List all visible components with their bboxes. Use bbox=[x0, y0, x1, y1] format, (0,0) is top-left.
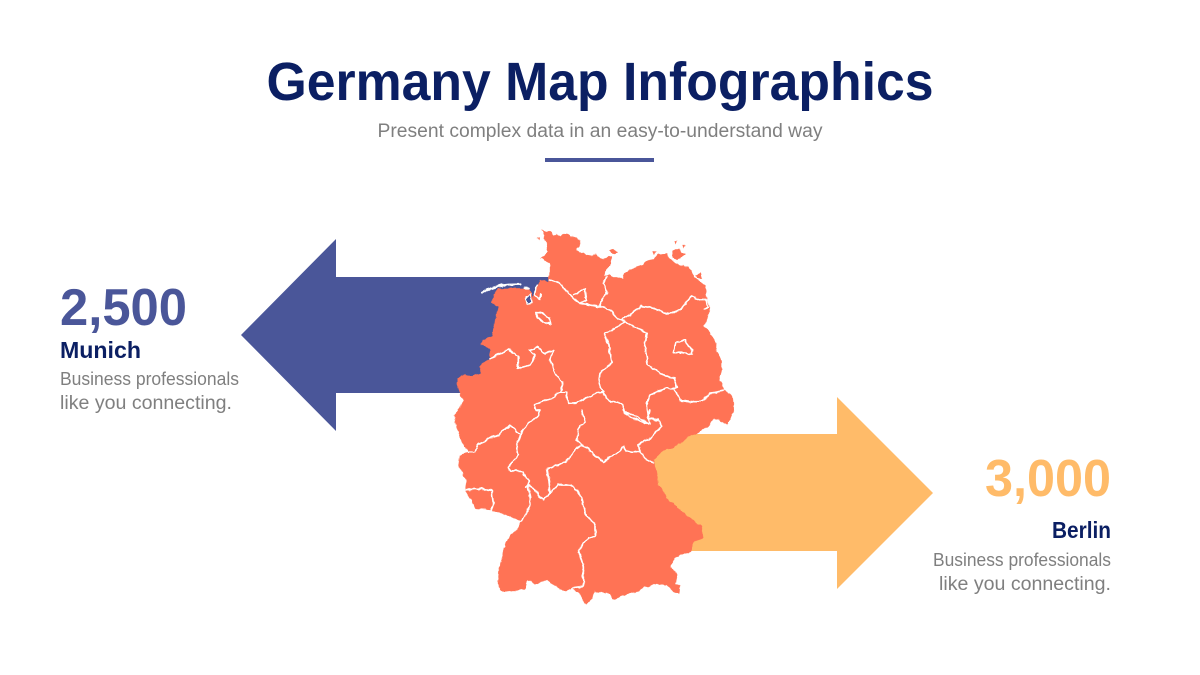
value 3,000: 3,000 bbox=[985, 450, 1111, 508]
title: Germany Map Infographics bbox=[266, 52, 934, 112]
label Munich: Munich bbox=[60, 337, 141, 363]
subtitle: Present complex data in an easy-to-understand way bbox=[378, 121, 823, 142]
label Berlin: Berlin bbox=[1052, 517, 1111, 543]
islands bbox=[536, 237, 703, 278]
map of Germany bbox=[453, 231, 734, 605]
description Berlin: Business professionals bbox=[933, 550, 1111, 570]
arrow: right orange bbox=[635, 397, 933, 589]
bremen bbox=[536, 313, 550, 323]
state borders bbox=[463, 277, 723, 588]
jade bay bbox=[525, 295, 532, 303]
description Munich: Business professionals bbox=[60, 369, 239, 389]
arrow: left blue bbox=[241, 239, 552, 431]
callout: Munich: like you connecting. bbox=[60, 393, 232, 414]
map outline bbox=[453, 231, 734, 605]
title underline bbox=[545, 158, 654, 162]
callout: Berlin bbox=[933, 450, 1111, 595]
frisian islands bbox=[482, 284, 528, 293]
callout: Berlin: like you connecting. bbox=[939, 574, 1111, 595]
callout: Munich bbox=[60, 279, 239, 414]
berlin bbox=[673, 339, 693, 354]
value 2,500: 2,500 bbox=[60, 279, 187, 337]
